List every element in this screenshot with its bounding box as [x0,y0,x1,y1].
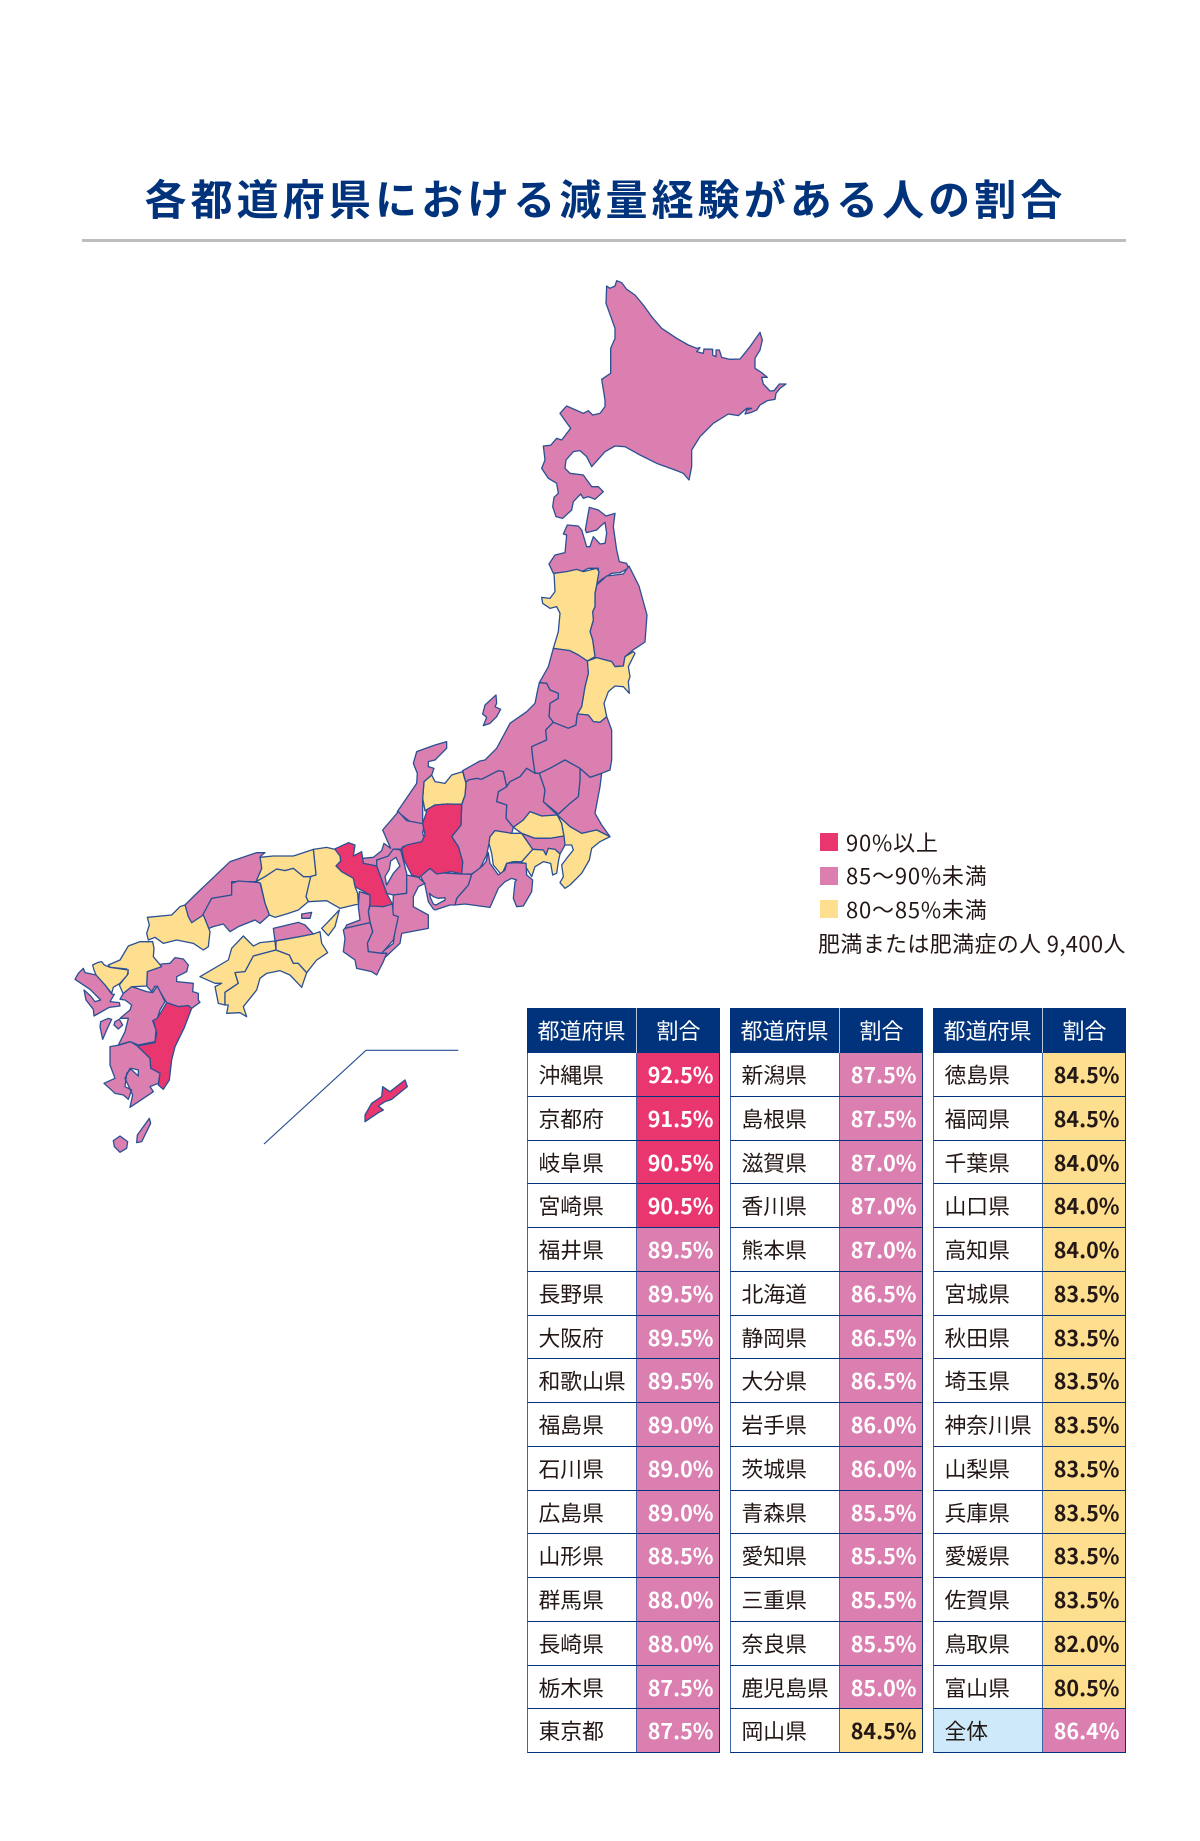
map region: 福岡県 [108,942,162,994]
row: 群馬県: 群馬県 [538,1584,604,1615]
map region: 北海道 [542,281,786,518]
map region: 長野県 [452,771,513,874]
row: 山口県: 84.0% [1054,1190,1120,1221]
map region: 小豆島 [302,912,312,918]
map region: 広島県 [203,881,269,932]
row: 千葉県: 84.0% [1054,1146,1120,1178]
table header: 都道府県 [740,1014,828,1046]
map region: 愛知県 [420,867,472,910]
map region: 佐賀県 [93,962,128,993]
map region: 静岡県 [455,853,533,907]
row: 鹿児島県: 85.0% [851,1672,916,1702]
row: 高知県: 高知県 [944,1234,1010,1265]
row: 神奈川県: 83.5% [1054,1409,1120,1440]
inset divider line [264,1050,458,1144]
map region: 群馬県 [497,768,557,827]
row: 栃木県: 87.5% [648,1672,714,1702]
map region: 岩手県 [587,566,647,667]
row: 熊本県: 熊本県 [742,1234,807,1265]
row: 福島県 [527,1403,720,1447]
table header [527,1008,720,1053]
row: 群馬県 [527,1578,720,1622]
row: 宮崎県: 宮崎県 [538,1190,604,1221]
row: 茨城県: 86.0% [851,1453,916,1484]
row: 新潟県: 新潟県 [742,1059,807,1090]
row: 高知県: 84.0% [1054,1234,1120,1265]
row: 北海道: 86.5% [851,1278,916,1309]
map region: 大分県 [147,958,200,1008]
map region: 茨城県 [557,768,610,837]
row: 岐阜県: 90.5% [648,1146,714,1178]
row: 埼玉県 [933,1359,1126,1403]
row: 島根県: 87.5% [851,1103,916,1134]
row: 富山県: 富山県 [944,1672,1010,1702]
row: 宮城県 [933,1272,1126,1316]
row: 滋賀県: 87.0% [851,1146,916,1178]
row: 全体: 86.4% [1054,1715,1120,1746]
map region: 屋久島 [113,1136,128,1152]
map region: 鳥取県 [256,849,316,882]
map region: 岐阜県 [402,804,463,877]
row: 石川県: 89.0% [648,1453,714,1484]
map region: 徳島県 [276,932,328,973]
map region: 栃木県 [539,760,580,814]
row: 長崎県: 長崎県 [538,1628,604,1659]
row: 大分県: 86.5% [851,1365,916,1396]
row: 徳島県: 徳島県 [944,1059,1010,1090]
row: 愛媛県: 83.5% [1054,1540,1120,1571]
row: 佐賀県: 83.5% [1054,1584,1120,1615]
row: 岩手県: 86.0% [851,1409,916,1440]
row: 福岡県 [933,1097,1126,1140]
row: 香川県: 87.0% [851,1190,916,1221]
map region: 奈良県 [367,904,398,953]
row: 大分県: 大分県 [742,1365,807,1396]
map region: 佐渡島 [483,695,501,726]
row: 大阪府: 89.5% [648,1322,714,1352]
row: 佐賀県 [933,1578,1126,1622]
row: 香川県 [730,1184,923,1228]
row: 山梨県: 83.5% [1054,1453,1120,1484]
row: 長野県: 長野県 [538,1278,604,1309]
row: 京都府 [527,1097,720,1140]
row: 宮崎県 [527,1184,720,1228]
row: 沖縄県 [527,1053,720,1097]
row: 神奈川県: 神奈川県 [944,1409,1032,1440]
row: 島根県 [730,1097,923,1140]
row: 神奈川県 [933,1403,1126,1447]
table 2 [730,1008,923,1753]
row: 長野県: 89.5% [648,1278,714,1309]
map region: 大阪府 [345,892,370,928]
map region: 埼玉県 [513,812,564,838]
row: 徳島県 [933,1053,1126,1097]
map region: 長崎県 [75,968,120,1016]
row: 福井県: 89.5% [648,1234,714,1265]
row: 兵庫県: 83.5% [1054,1496,1120,1528]
legend swatch: 80〜85%未満 [820,900,838,918]
row: 鹿児島県 [730,1666,923,1709]
row: 福井県 [527,1228,720,1272]
row: 北海道: 北海道 [742,1278,807,1309]
map region: 山口県 [147,905,210,950]
map region: 秋田県 [542,568,599,661]
row: 宮城県: 83.5% [1054,1278,1120,1309]
legend label: 85〜90%未満: 85〜90%未満 [846,859,988,891]
row: 東京都: 87.5% [648,1715,714,1746]
row: 宮城県: 宮城県 [944,1278,1010,1309]
row: 山梨県: 山梨県 [944,1453,1010,1484]
map region: 宮崎県 [137,1003,192,1089]
row: 埼玉県: 83.5% [1054,1365,1120,1396]
map region: 山梨県 [489,831,533,875]
map region: 山形県 [539,648,588,728]
row: 千葉県 [933,1140,1126,1184]
row: 高知県 [933,1228,1126,1272]
row: 秋田県: 83.5% [1054,1322,1120,1352]
legend swatch: 90%以上 [820,833,838,851]
legend label: 80〜85%未満: 80〜85%未満 [846,893,988,925]
map region: 岡山県 [256,868,311,917]
row: 栃木県 [527,1666,720,1709]
row: 新潟県: 87.5% [851,1059,916,1090]
row: 青森県: 青森県 [742,1496,807,1528]
row: 静岡県: 86.5% [851,1322,916,1352]
row: 青森県 [730,1490,923,1534]
row: 和歌山県: 和歌山県 [538,1365,626,1396]
row: 沖縄県: 92.5% [648,1059,714,1090]
row: 茨城県: 茨城県 [742,1453,807,1484]
row: 石川県 [527,1447,720,1490]
row: 和歌山県 [527,1359,720,1403]
row: 奈良県: 85.5% [851,1628,916,1659]
row: 兵庫県 [933,1490,1126,1534]
row: 全体: 全体 [944,1715,988,1746]
row: 奈良県: 奈良県 [742,1628,807,1659]
map region: 富山県 [423,772,466,811]
row: 山形県: 88.5% [648,1540,714,1571]
row: 島根県: 島根県 [742,1103,807,1134]
map region: 熊本県 [118,986,165,1045]
map region: 千葉県 [557,815,610,888]
row: 三重県 [730,1578,923,1622]
row: 京都府: 91.5% [648,1103,714,1134]
map region: 滋賀県 [377,849,407,895]
map region: 種子島 [137,1118,151,1143]
legend label: 90%以上: 90%以上 [846,826,939,858]
row: 千葉県: 千葉県 [944,1146,1010,1178]
row: 福岡県: 84.5% [1054,1103,1120,1134]
row: 山形県: 山形県 [538,1540,604,1571]
row: 広島県: 広島県 [538,1496,604,1528]
map region: 愛媛県 [200,936,276,1005]
row: 静岡県: 静岡県 [742,1322,807,1352]
map region: 淡路島 [322,910,339,936]
row: 滋賀県: 滋賀県 [742,1146,807,1178]
row: 兵庫県: 兵庫県 [944,1496,1010,1528]
row: 全体 [933,1709,1126,1753]
row: 和歌山県: 89.5% [648,1365,714,1396]
table 1 [527,1008,720,1753]
table header: 都道府県 [943,1014,1032,1046]
row: 大阪府: 大阪府 [538,1322,604,1352]
map region: 青森県 [549,507,628,584]
map region: 天草 [100,1018,123,1039]
map region: 兵庫県 [306,847,358,908]
legend [818,826,1126,959]
row: 滋賀県 [730,1140,923,1184]
row: 山形県 [527,1534,720,1578]
row: 石川県: 石川県 [538,1453,604,1484]
map region: 神奈川県 [522,848,560,877]
row: 東京都 [527,1709,720,1753]
map region: 沖縄県 [365,1080,407,1122]
legend swatch: 85〜90%未満 [820,867,838,885]
row: 青森県: 85.5% [851,1496,916,1528]
row: 富山県: 80.5% [1054,1672,1120,1702]
title: 各都道府県における減量経験がある人の割合 [144,167,1066,228]
map region: 石川県 [397,742,447,825]
row: 岡山県: 84.5% [851,1715,916,1746]
row: 群馬県: 88.0% [648,1584,714,1615]
map region: 福井県 [363,812,426,866]
table header: 割合 [656,1014,700,1046]
map region: 香川県 [273,922,313,941]
row: 三重県: 85.5% [851,1584,916,1615]
row: 山口県 [933,1184,1126,1228]
row: 秋田県 [933,1316,1126,1359]
map region: 和歌山県 [343,923,387,975]
map region: 島根県 [185,853,265,923]
row: 岩手県 [730,1403,923,1447]
table header: 割合 [859,1014,904,1046]
map region: 新潟県 [463,683,558,787]
row: 広島県 [527,1490,720,1534]
row: 長崎県: 88.0% [648,1628,714,1659]
map region: 宮城県 [577,652,635,722]
legend note: 肥満または肥満症の人 9,400人 [818,927,1126,959]
row: 鹿児島県: 鹿児島県 [742,1672,829,1702]
map region: 東京都 [522,833,565,855]
map region: 福島県 [532,714,612,777]
row: 岡山県: 岡山県 [742,1715,807,1746]
map region: 京都府 [334,843,392,907]
row: 大分県 [730,1359,923,1403]
row: 福島県: 福島県 [538,1409,604,1440]
row: 茨城県 [730,1447,923,1490]
row: 愛知県 [730,1534,923,1578]
row: 山梨県 [933,1447,1126,1490]
row: 岐阜県 [527,1140,720,1184]
row: 静岡県 [730,1316,923,1359]
row: 佐賀県: 佐賀県 [944,1584,1010,1615]
row: 熊本県: 87.0% [851,1234,916,1265]
row: 福島県: 89.0% [648,1409,714,1440]
row: 広島県: 89.0% [648,1496,714,1528]
row: 愛知県: 85.5% [851,1540,916,1571]
row: 大阪府 [527,1316,720,1359]
row: 沖縄県: 沖縄県 [538,1059,604,1090]
row: 福岡県: 福岡県 [944,1103,1010,1134]
map region: 鹿児島県 [104,1042,160,1107]
row: 栃木県: 栃木県 [538,1672,604,1702]
row: 愛媛県 [933,1534,1126,1578]
row: 鳥取県 [933,1622,1126,1666]
row: 香川県: 香川県 [742,1190,807,1221]
table header [933,1008,1126,1053]
row: 奈良県 [730,1622,923,1666]
row: 東京都: 東京都 [538,1715,604,1746]
row: 徳島県: 84.5% [1054,1059,1120,1090]
row: 三重県: 三重県 [742,1584,807,1615]
row: 北海道 [730,1272,923,1316]
row: 京都府: 京都府 [538,1103,604,1134]
row: 富山県 [933,1666,1126,1709]
row: 岐阜県: 岐阜県 [538,1146,604,1178]
row: 岡山県 [730,1709,923,1753]
row: 新潟県 [730,1053,923,1097]
row: 愛知県: 愛知県 [742,1540,807,1571]
table header [730,1008,923,1053]
table header: 都道府県 [537,1014,626,1046]
row: 宮崎県: 90.5% [648,1190,714,1221]
row: 埼玉県: 埼玉県 [944,1365,1010,1396]
row: 山口県: 山口県 [944,1190,1010,1221]
row: 福井県: 福井県 [538,1234,604,1265]
map region: 三重県 [381,875,428,960]
row: 長崎県 [527,1622,720,1666]
row: 愛媛県: 愛媛県 [944,1540,1010,1571]
row: 長野県 [527,1272,720,1316]
row: 鳥取県: 82.0% [1054,1628,1120,1659]
table header: 割合 [1062,1014,1106,1046]
row: 鳥取県: 鳥取県 [944,1628,1010,1659]
row: 秋田県: 秋田県 [944,1322,1010,1352]
map region: 高知県 [225,950,307,1017]
row: 熊本県 [730,1228,923,1272]
row: 岩手県: 岩手県 [742,1409,807,1440]
table 3 [933,1008,1126,1753]
